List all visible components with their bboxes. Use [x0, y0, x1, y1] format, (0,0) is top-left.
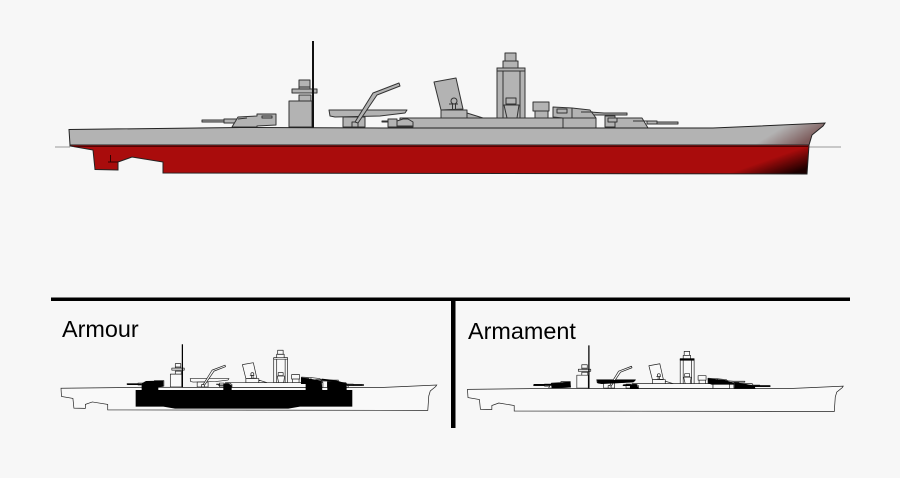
horizontal divider — [51, 298, 850, 301]
waterline — [55, 146, 841, 148]
boot-top stripe — [74, 146, 808, 148]
red lower hull — [70, 145, 809, 174]
vertical divider — [451, 299, 456, 428]
armament ship outline — [467, 345, 843, 411]
rudder detail — [108, 155, 118, 162]
superstructure, turrets and mast — [202, 53, 678, 128]
panel: armour — [61, 316, 437, 410]
panel: armament — [467, 318, 843, 411]
armour coverage in black — [127, 377, 363, 409]
armour ship outline — [61, 344, 437, 410]
armament coverage in black — [534, 358, 770, 389]
main battleship illustration — [69, 41, 825, 174]
grey upper hull — [69, 123, 825, 145]
heading: armour: Armour — [62, 316, 139, 342]
mast — [312, 41, 314, 128]
heading: armament: Armament — [468, 318, 576, 344]
